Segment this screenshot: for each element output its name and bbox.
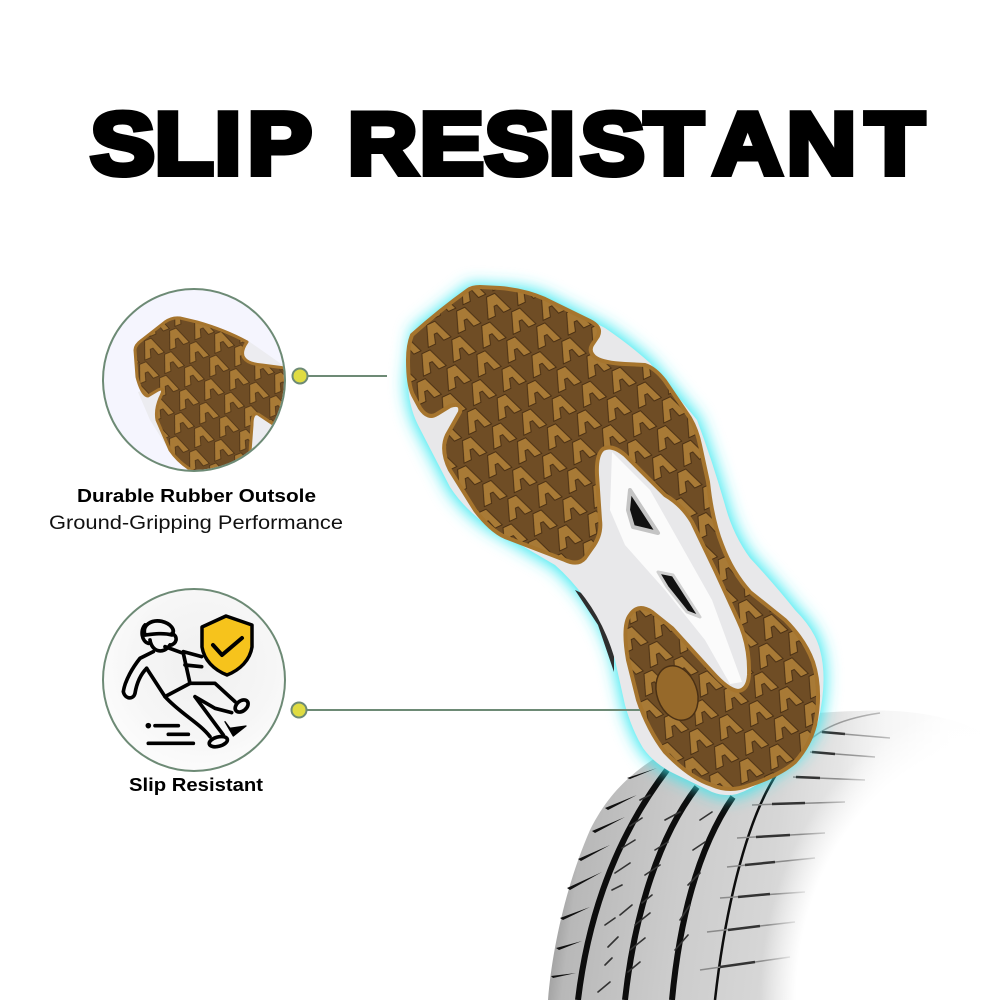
callout text: slip resistant: Slip Resistant [129,775,263,795]
midsole vent upper [628,490,658,533]
callout text: outsole: Durable Rubber Outsole [77,486,316,506]
heel pivot circle [649,660,705,726]
tire illustration [548,690,1000,1000]
title: SLIP RESISTANT [90,94,924,193]
cyan glow [406,284,826,797]
white midsole [408,286,824,795]
infographic canvas [50,110,927,1000]
midsole vent lower [658,572,700,617]
connector: outsole callout [292,368,387,384]
callout text: outsole [49,486,343,534]
midfoot highlight [610,452,742,684]
callout circle: outsole close-up [103,289,292,475]
callout text: outsole: Ground-Gripping Performance [49,513,343,534]
shoe outsole [406,284,826,797]
callout circle: slip resistant icon [103,589,285,771]
brown rubber outsole [408,287,818,789]
icon: falling person [123,621,250,749]
icon: yellow shield with check [202,616,252,675]
connector: slip resistant callout [292,702,640,718]
dark shoe upper [575,590,614,672]
